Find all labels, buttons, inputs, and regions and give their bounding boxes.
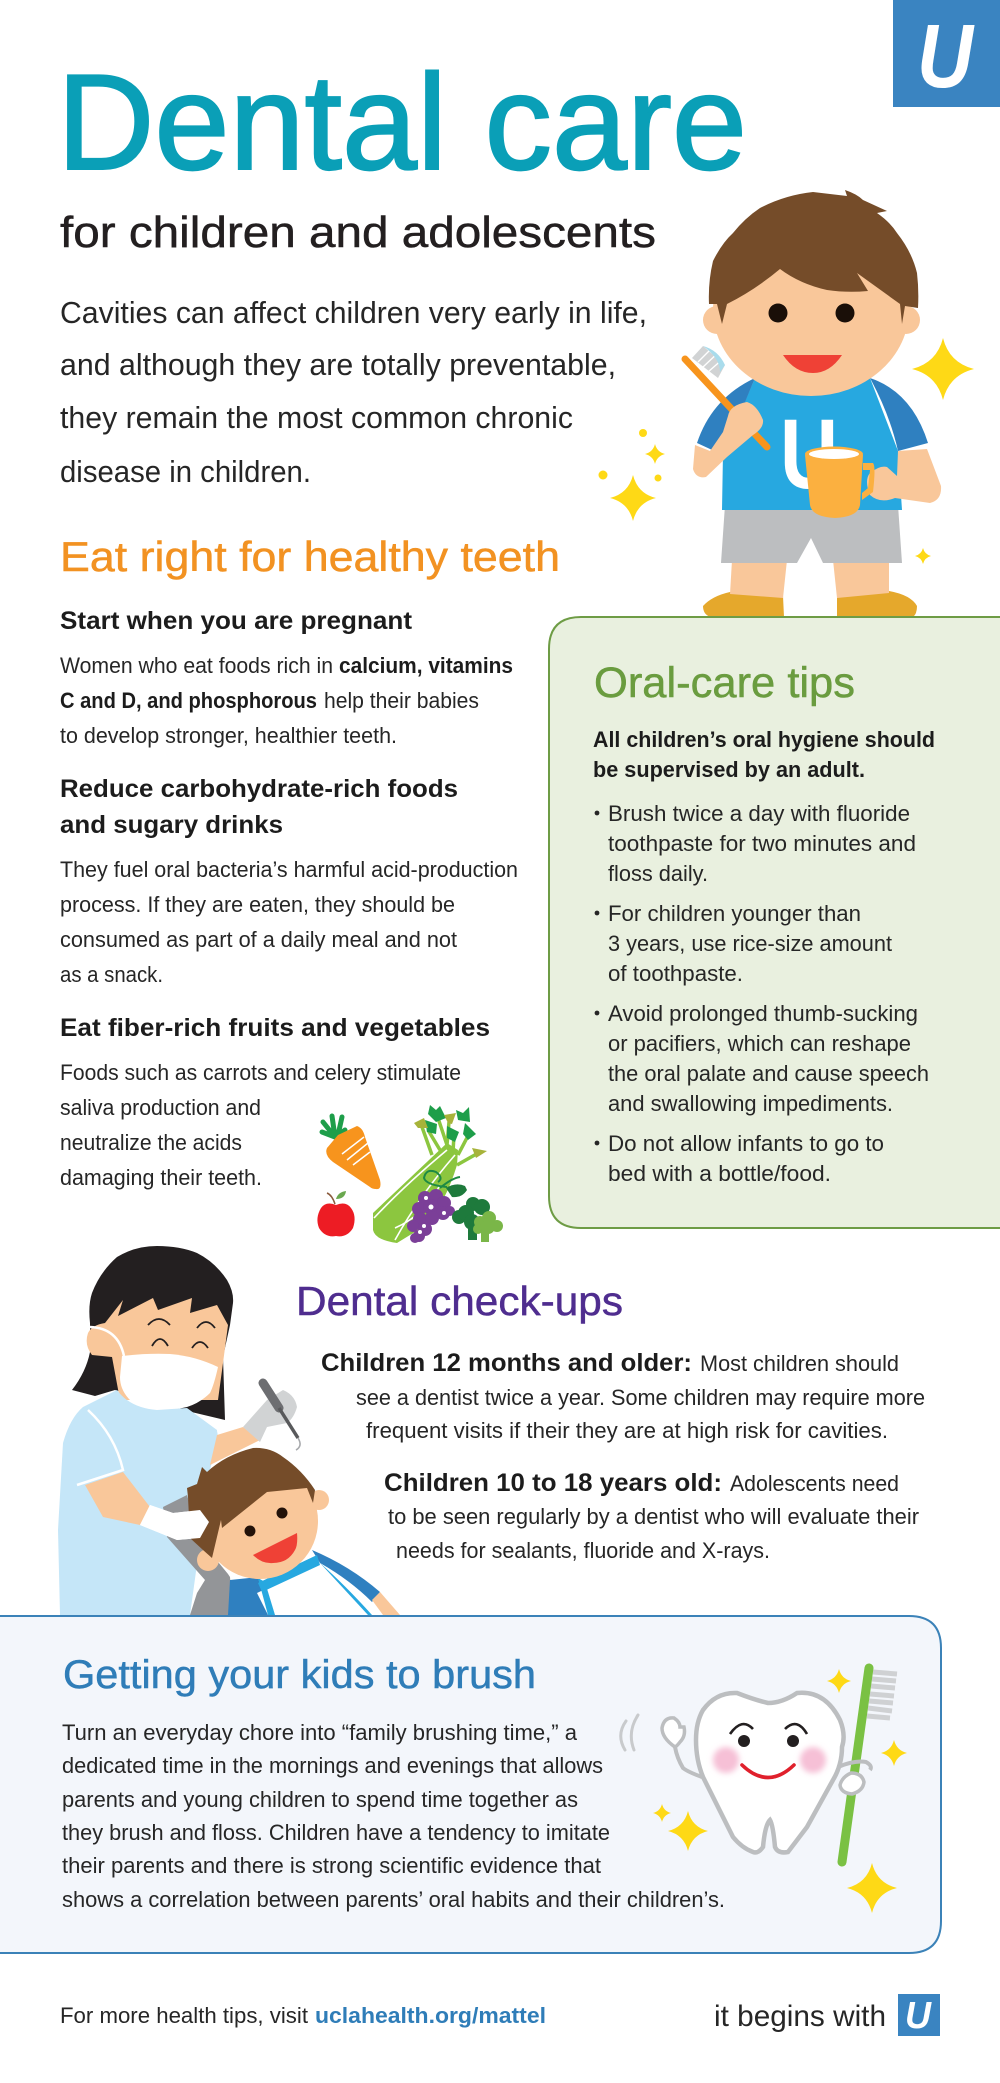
brushing paragraph: dedicated time in the mornings and evenings that allows xyxy=(62,1753,603,1778)
block: children 12 months and older: frequent visits if their they are at high risk for cavities. xyxy=(366,1418,888,1443)
block: fiber-rich foods: damaging their teeth. xyxy=(60,1165,262,1190)
tip: avoid thumb-sucking xyxy=(595,1001,929,1116)
block: children 12 months and older xyxy=(321,1349,925,1443)
block: reduce carbohydrates: They fuel oral bacteria’s harmful acid-production xyxy=(60,857,518,882)
tip: rice-size amount: 3 years, use rice-size amount xyxy=(608,931,892,956)
tip: brush twice a day: Brush twice a day with fluoride xyxy=(608,801,910,826)
block: start when pregnant: Women who eat foods rich in xyxy=(60,653,333,678)
block: fiber-rich foods: Foods such as carrots and celery stimulate xyxy=(60,1060,461,1085)
footer: website link xyxy=(60,2003,546,2028)
illustration: fruits and vegetables xyxy=(317,1105,503,1243)
heading: dental check-ups: Dental check-ups xyxy=(296,1278,623,1324)
block: fiber-rich foods: saliva production and xyxy=(60,1095,261,1120)
block: fiber-rich foods xyxy=(60,1014,490,1190)
brushing paragraph: they brush and floss. Children have a tendency to imitate xyxy=(62,1820,610,1845)
block: reduce carbohydrates: process. If they are eaten, they should be xyxy=(60,892,455,917)
heading: oral-care tips: Oral-care tips xyxy=(594,659,855,707)
block: children 10 to 18 years old: needs for sealants, fluoride and X-rays. xyxy=(396,1538,770,1563)
footer: website link: uclahealth.org/mattel xyxy=(315,2003,546,2028)
block: reduce carbohydrates: and sugary drinks xyxy=(60,811,283,839)
block: start when pregnant: C and D, and phosphorous xyxy=(60,688,317,713)
brushing paragraph: their parents and there is strong scientific evidence that xyxy=(62,1853,601,1878)
block: children 10 to 18 years old: Children 10 to 18 years old: xyxy=(384,1469,722,1497)
subtitle: for children and adolescents xyxy=(60,208,656,257)
panel: oral-care tips xyxy=(549,617,1000,1228)
block: children 12 months and older: Most children should xyxy=(700,1351,899,1376)
logo: U badge: U xyxy=(917,7,975,107)
tip: no bottle in bed xyxy=(595,1131,884,1186)
supervision note xyxy=(593,727,935,782)
footer: website link: For more health tips, visit xyxy=(60,2003,308,2028)
supervision note: be supervised by an adult. xyxy=(593,757,865,782)
tip: rice-size amount: of toothpaste. xyxy=(608,961,743,986)
tip: no bottle in bed: Do not allow infants to go to xyxy=(608,1131,884,1156)
tip: avoid thumb-sucking: the oral palate and cause speech xyxy=(608,1061,929,1086)
intro text: and although they are totally preventable, xyxy=(60,347,616,382)
panel: getting your kids to brush xyxy=(0,1616,941,1953)
block: reduce carbohydrates: Reduce carbohydrate-rich foods xyxy=(60,775,458,803)
block: children 10 to 18 years old: Adolescents need xyxy=(730,1471,899,1496)
block: children 12 months and older: Children 12 months and older: xyxy=(321,1349,692,1377)
block: start when pregnant: help their babies xyxy=(324,688,479,713)
tip: avoid thumb-sucking: or pacifiers, which can reshape xyxy=(608,1031,911,1056)
brushing paragraph xyxy=(62,1720,725,1912)
brushing paragraph: parents and young children to spend time together as xyxy=(62,1787,578,1812)
supervision note: All children’s oral hygiene should xyxy=(593,727,935,752)
heading: getting your kids to brush: Getting your kids to brush xyxy=(63,1653,536,1697)
tip: brush twice a day: toothpaste for two minutes and xyxy=(608,831,916,856)
brushing paragraph: Turn an everyday chore into “family brushing time,” a xyxy=(62,1720,578,1745)
intro text xyxy=(60,295,647,489)
illustration: smiling tooth with toothbrush xyxy=(621,1668,907,1913)
intro text: they remain the most common chronic xyxy=(60,400,573,435)
block: fiber-rich foods: neutralize the acids xyxy=(60,1130,242,1155)
tip: rice-size amount: For children younger than xyxy=(608,901,861,926)
footer: it begins with U logo xyxy=(714,1994,940,2037)
block: children 10 to 18 years old xyxy=(384,1469,919,1563)
logo: U badge xyxy=(893,0,1000,107)
block: fiber-rich foods: Eat fiber-rich fruits and vegetables xyxy=(60,1014,490,1042)
illustration: boy with toothbrush and cup xyxy=(685,190,941,617)
brushing paragraph: shows a correlation between parents’ oral habits and their children’s. xyxy=(62,1887,725,1912)
block: start when pregnant: to develop stronger, healthier teeth. xyxy=(60,723,397,748)
illustration: dentist and child xyxy=(58,1246,400,1615)
block: children 12 months and older: see a dentist twice a year. Some children may require more xyxy=(356,1385,925,1410)
block: reduce carbohydrates xyxy=(60,775,518,987)
tip: brush twice a day xyxy=(595,801,916,886)
block: start when pregnant: calcium, vitamins xyxy=(339,653,513,678)
illustration: boy with toothbrush and cup: U xyxy=(780,398,838,509)
block: start when pregnant xyxy=(60,607,513,748)
block: start when pregnant: Start when you are pregnant xyxy=(60,607,413,635)
intro text: disease in children. xyxy=(60,454,311,489)
tip: no bottle in bed: bed with a bottle/food. xyxy=(608,1161,831,1186)
intro text: Cavities can affect children very early in life, xyxy=(60,295,647,330)
tip: brush twice a day: floss daily. xyxy=(608,861,708,886)
heading: eat right: Eat right for healthy teeth xyxy=(60,533,560,580)
tip: avoid thumb-sucking: and swallowing impediments. xyxy=(608,1091,893,1116)
block: children 10 to 18 years old: to be seen regularly by a dentist who will evaluate their xyxy=(388,1504,919,1529)
block: reduce carbohydrates: as a snack. xyxy=(60,962,163,987)
sparkles around boy xyxy=(598,338,974,564)
footer: it begins with U logo: U xyxy=(905,1995,932,2037)
footer: it begins with U logo: it begins with xyxy=(714,2000,886,2033)
title: Dental care xyxy=(57,46,747,198)
tip: avoid thumb-sucking: Avoid prolonged thumb-sucking xyxy=(608,1001,918,1026)
block: reduce carbohydrates: consumed as part of a daily meal and not xyxy=(60,927,457,952)
tip: rice-size amount xyxy=(595,901,892,986)
